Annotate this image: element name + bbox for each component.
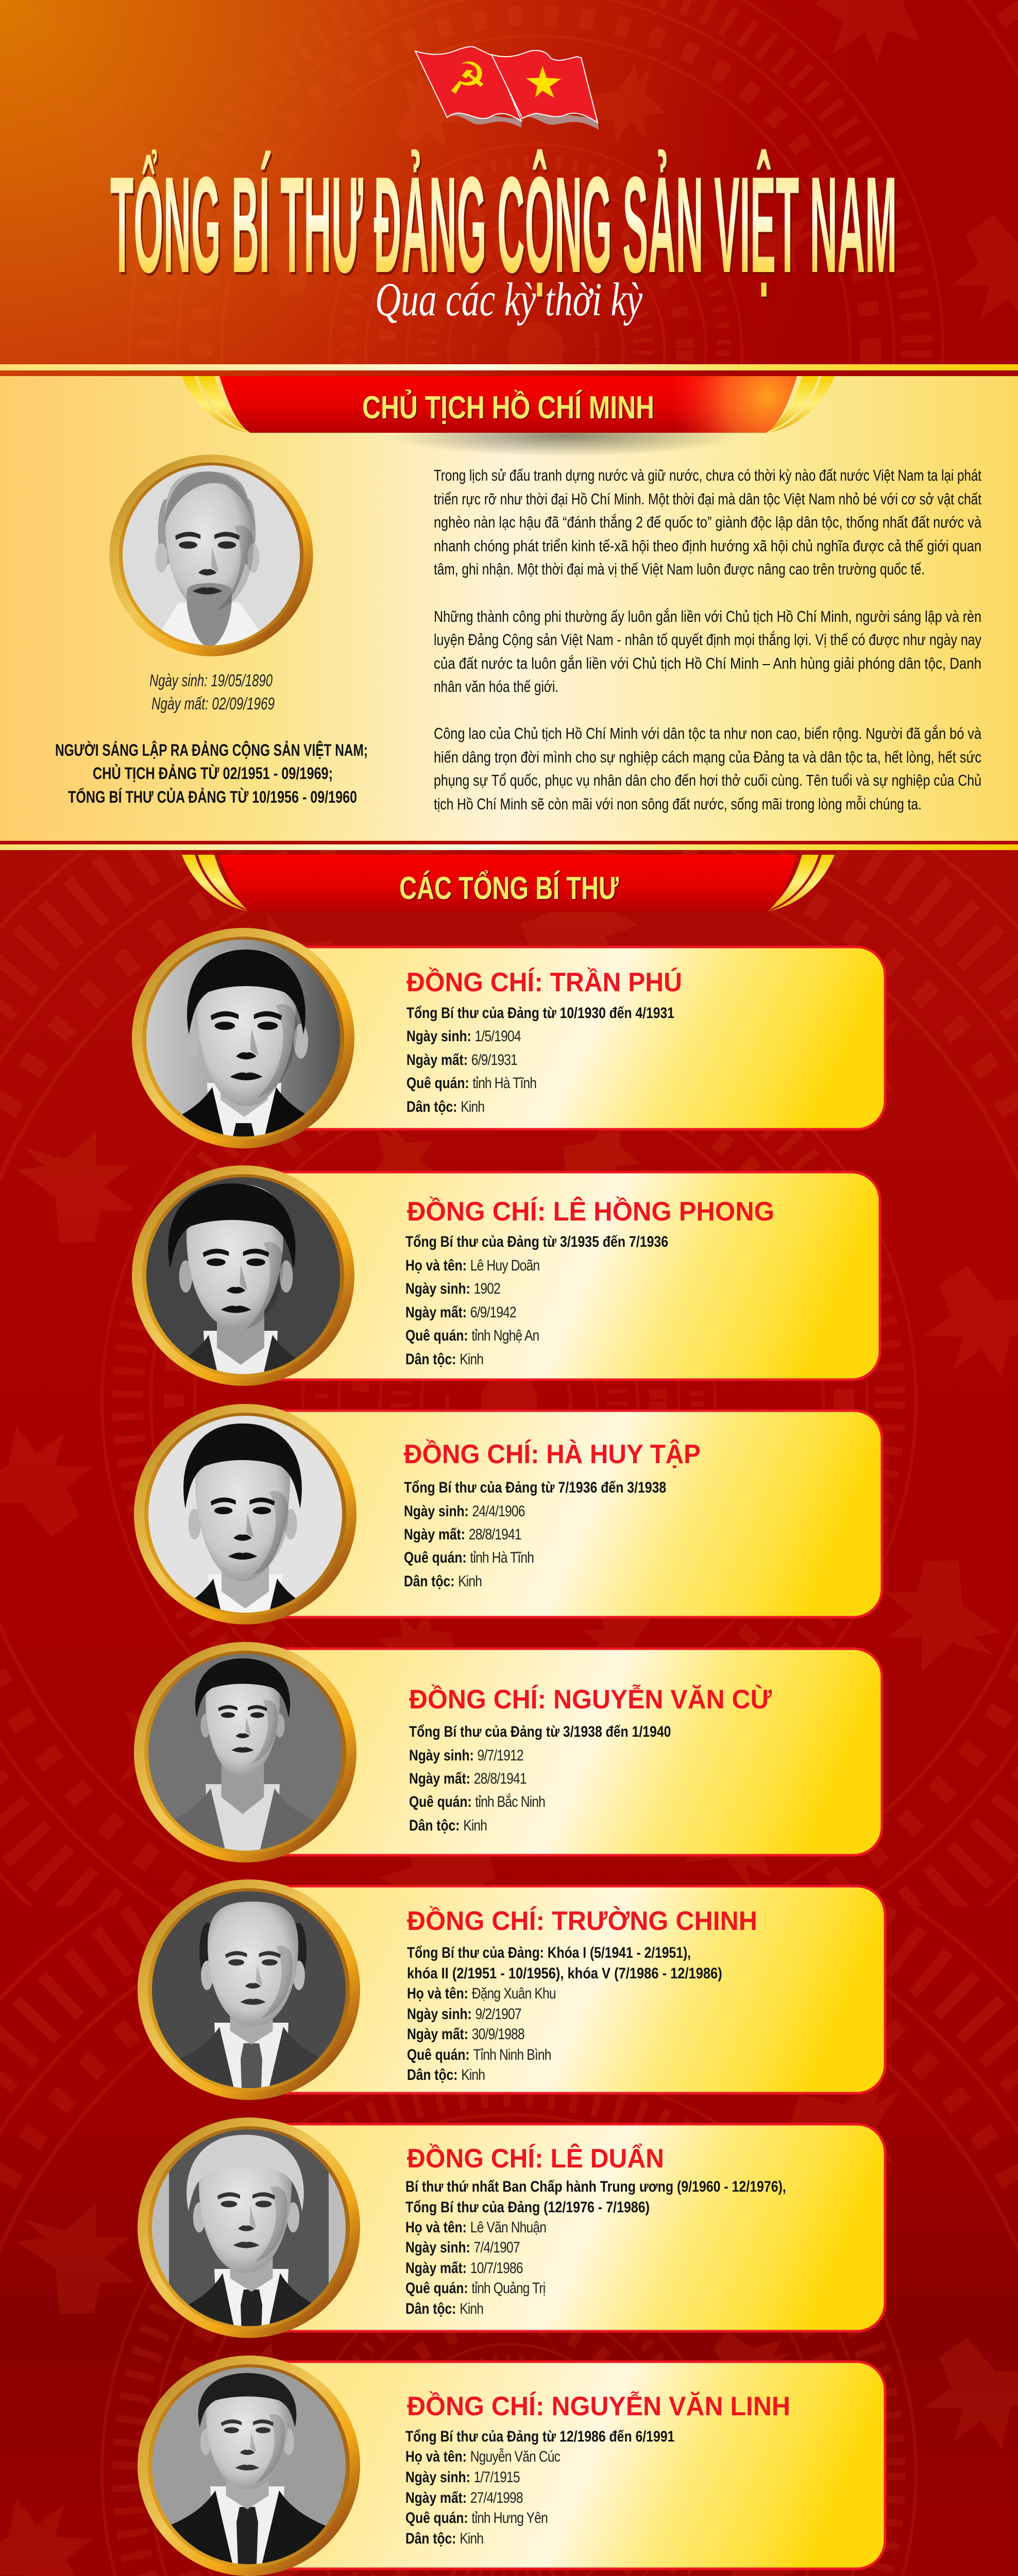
details: Dân tộc: Kinh bbox=[409, 1817, 487, 1834]
flags emblem bbox=[415, 47, 599, 130]
card: Nguyễn Văn Cừ bbox=[119, 1642, 882, 1907]
details: Họ và tên: Nguyễn Văn Cúc bbox=[405, 2448, 560, 2465]
name: ĐỒNG CHÍ: LÊ DUẨN bbox=[407, 2143, 664, 2174]
portrait: Trường Chinh bbox=[128, 1879, 375, 2145]
details: khóa II (2/1951 - 10/1956), khóa V (7/1986 - 12/1986) bbox=[407, 1964, 722, 1982]
birth and death dates: Ngày sinh: 19/05/1890 bbox=[149, 671, 273, 690]
details: Ngày mất: 6/9/1942 bbox=[405, 1303, 516, 1321]
bronze drum pattern upper bbox=[0, 706, 1018, 2097]
role summary bbox=[55, 741, 368, 806]
details: Dân tộc: Kinh bbox=[406, 1098, 484, 1115]
banner: Các Tổng Bí thư: CÁC TỔNG BÍ THƯ bbox=[399, 870, 619, 906]
section background bbox=[0, 841, 1018, 2576]
details: Quê quán: tỉnh Nghệ An bbox=[405, 1327, 539, 1344]
details bbox=[405, 1233, 668, 1368]
banner: Chủ tịch Hồ Chí Minh: CHỦ TỊCH HỒ CHÍ MINH bbox=[363, 391, 655, 427]
role summary: CHỦ TỊCH ĐẢNG TỪ 02/1951 - 09/1969; bbox=[93, 764, 333, 783]
details: Tổng Bí thư của Đảng từ 3/1935 đến 7/1936 bbox=[405, 1233, 668, 1250]
gold divider bbox=[0, 844, 1018, 850]
bronze drum pattern lower bbox=[0, 2370, 1018, 2576]
details bbox=[405, 2178, 786, 2317]
party flag: ☭ bbox=[447, 53, 487, 105]
biography text bbox=[434, 466, 982, 813]
details: Ngày sinh: 1/5/1904 bbox=[406, 1027, 521, 1045]
details: Quê quán: tỉnh Hà Tĩnh bbox=[404, 1549, 534, 1566]
header bronze drum pattern bbox=[0, 0, 1018, 1046]
details: Quê quán: tỉnh Hưng Yên bbox=[405, 2509, 548, 2527]
national flag bbox=[491, 50, 599, 130]
details: Dân tộc: Kinh bbox=[405, 2530, 483, 2547]
portrait: Hồ Chí Minh bbox=[109, 454, 313, 656]
details: Ngày sinh: 7/4/1907 bbox=[405, 2239, 520, 2256]
details: Tổng Bí thư của Đảng từ 7/1936 đến 3/1938 bbox=[404, 1479, 666, 1496]
details: Ngày mất: 10/7/1986 bbox=[405, 2259, 523, 2277]
details: Ngày sinh: 1/7/1915 bbox=[405, 2468, 520, 2486]
details: Dân tộc: Kinh bbox=[404, 1572, 482, 1590]
details: Ngày mất: 27/4/1998 bbox=[405, 2489, 523, 2506]
role summary: TỔNG BÍ THƯ CỦA ĐẢNG TỪ 10/1956 - 09/1960 bbox=[68, 788, 357, 806]
card: Trường Chinh bbox=[128, 1879, 885, 2145]
role summary: NGƯỜI SÁNG LẬP RA ĐẢNG CỘNG SẢN VIỆT NAM; bbox=[55, 741, 368, 759]
panel: President Ho Chi Minh bbox=[0, 376, 1018, 841]
details: Ngày mất: 28/8/1941 bbox=[404, 1526, 521, 1543]
details: Tổng Bí thư của Đảng từ 10/1930 đến 4/1931 bbox=[406, 1004, 674, 1022]
details: Ngày sinh: 1902 bbox=[405, 1280, 500, 1297]
details bbox=[404, 1479, 666, 1590]
details: Quê quán: tỉnh Hà Tĩnh bbox=[406, 1074, 536, 1092]
details: Dân tộc: Kinh bbox=[405, 1350, 483, 1368]
subtitle: Qua các kỳ thời kỳ bbox=[375, 273, 642, 326]
card: Lê Hồng Phong bbox=[117, 1165, 880, 1453]
banner: Các Tổng Bí thư bbox=[182, 855, 835, 912]
bronze drum pattern middle bbox=[0, 1777, 1018, 2576]
portrait: Trần Phú bbox=[121, 928, 368, 1206]
details bbox=[406, 1004, 674, 1115]
details: Ngày sinh: 24/4/1906 bbox=[404, 1502, 525, 1520]
party flag bbox=[415, 47, 521, 128]
details: Ngày mất: 6/9/1931 bbox=[406, 1051, 517, 1069]
details: Quê quán: tỉnh Bắc Ninh bbox=[409, 1793, 545, 1810]
birth and death dates: Ngày mất: 02/09/1969 bbox=[151, 694, 275, 713]
name: ĐỒNG CHÍ: TRẦN PHÚ bbox=[406, 967, 682, 997]
biography text: nhân văn hóa thế giới. bbox=[434, 677, 558, 696]
details: Quê quán: Tỉnh Ninh Bình bbox=[407, 2046, 551, 2063]
details: Dân tộc: Kinh bbox=[407, 2066, 485, 2083]
name: ĐỒNG CHÍ: NGUYỄN VĂN LINH bbox=[407, 2391, 790, 2421]
card: Trần Phú bbox=[121, 928, 885, 1206]
details bbox=[405, 2428, 674, 2547]
details: Bí thư thứ nhất Ban Chấp hành Trung ương (9/1960 - 12/1976), bbox=[405, 2178, 786, 2195]
details: Tổng Bí thư của Đảng từ 12/1986 đến 6/1991 bbox=[405, 2428, 674, 2445]
details: Tổng Bí thư của Đảng (12/1976 - 7/1986) bbox=[405, 2198, 650, 2216]
card: Nguyễn Văn Linh bbox=[124, 2355, 885, 2576]
name: ĐỒNG CHÍ: TRƯỜNG CHINH bbox=[407, 1906, 757, 1936]
details: Tổng Bí thư của Đảng từ 3/1938 đến 1/1940 bbox=[409, 1723, 671, 1740]
portrait: Nguyễn Văn Linh bbox=[124, 2355, 371, 2576]
details: Tổng Bí thư của Đảng: Khóa I (5/1941 - 2/1951), bbox=[407, 1944, 691, 1961]
card: Lê Duẩn bbox=[138, 2117, 885, 2392]
name: ĐỒNG CHÍ: LÊ HỒNG PHONG bbox=[407, 1196, 774, 1227]
banner: Chủ tịch Hồ Chí Minh bbox=[182, 376, 835, 433]
details: Họ và tên: Lê Văn Nhuận bbox=[405, 2218, 546, 2236]
birth and death dates bbox=[149, 671, 275, 713]
details: Quê quán: tỉnh Quảng Trị bbox=[405, 2279, 545, 2297]
portrait: Nguyễn Văn Cừ bbox=[119, 1642, 366, 1907]
banner: Các Tổng Bí thư: CÁC TỔNG BÍ THƯ bbox=[400, 871, 620, 907]
details: Dân tộc: Kinh bbox=[405, 2300, 483, 2317]
details: Ngày sinh: 9/7/1912 bbox=[409, 1747, 523, 1764]
details bbox=[407, 1944, 722, 2083]
details: Ngày mất: 30/9/1988 bbox=[407, 2025, 524, 2043]
banner: Chủ tịch Hồ Chí Minh: CHỦ TỊCH HỒ CHÍ MINH bbox=[362, 390, 654, 426]
portrait: Hà Huy Tập bbox=[122, 1404, 369, 1697]
header background bbox=[0, 0, 1018, 376]
gold divider bbox=[0, 364, 1018, 370]
details: Họ và tên: Lê Huy Doãn bbox=[405, 1257, 539, 1274]
name: ĐỒNG CHÍ: NGUYỄN VĂN CỪ bbox=[409, 1684, 772, 1715]
name: ĐỒNG CHÍ: HÀ HUY TẬP bbox=[404, 1439, 701, 1469]
card: Hà Huy Tập bbox=[122, 1404, 882, 1697]
details bbox=[409, 1723, 671, 1834]
details: Ngày sinh: 9/2/1907 bbox=[407, 2005, 521, 2023]
details: Họ và tên: Đặng Xuân Khu bbox=[407, 1985, 556, 2002]
portrait: Lê Duẩn bbox=[138, 2117, 363, 2392]
details: Ngày mất: 28/8/1941 bbox=[409, 1770, 527, 1787]
portrait: Lê Hồng Phong bbox=[117, 1165, 364, 1453]
